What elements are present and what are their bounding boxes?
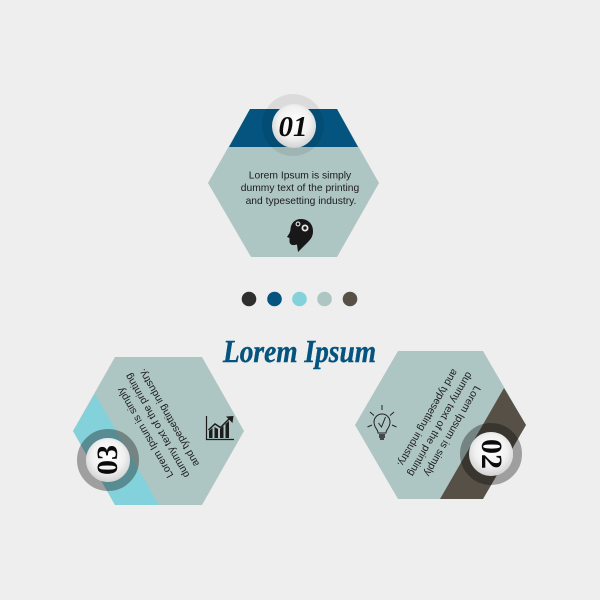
text block 02: and typesetting industry. <box>394 367 459 468</box>
text block 01: Lorem Ipsum is simply <box>249 170 352 182</box>
hexagon body 01 <box>208 109 379 257</box>
text block 02: dummy text of the printing <box>405 370 474 478</box>
icon: head with gears <box>287 219 313 252</box>
number badge 03: 03 <box>91 445 124 475</box>
icon: rising bar chart <box>206 416 234 440</box>
text block 02 <box>393 363 486 485</box>
icon: light bulb with check <box>368 405 396 439</box>
panel: hexagon 03 <box>73 357 244 505</box>
text block 01: and typesetting industry. <box>246 196 356 207</box>
text block 01: dummy text of the printing <box>241 183 360 194</box>
panel: hexagon 02 <box>355 351 526 499</box>
text block 03: and typesetting industry. <box>137 367 202 468</box>
text block 02: Lorem Ipsum is simply <box>421 384 482 479</box>
panel: hexagon 01 <box>208 94 379 257</box>
number badge 01: 01 <box>278 111 308 143</box>
hexagon body 02 <box>355 351 526 499</box>
number badge 02: 02 <box>475 439 508 469</box>
number badge 02 <box>464 428 518 480</box>
title: Lorem Ipsum <box>222 333 376 369</box>
text block 03: dummy text of the printing <box>123 371 192 479</box>
text block 03: Lorem Ipsum is simply <box>115 384 176 479</box>
side band 03 <box>73 394 159 505</box>
text block 03 <box>111 364 204 486</box>
hexagon body 03 <box>73 357 244 505</box>
dots row <box>242 292 357 306</box>
top band 01 <box>229 109 358 147</box>
number badge 03 <box>82 434 134 486</box>
number badge 01 <box>262 94 324 156</box>
side band 02 <box>440 388 526 499</box>
